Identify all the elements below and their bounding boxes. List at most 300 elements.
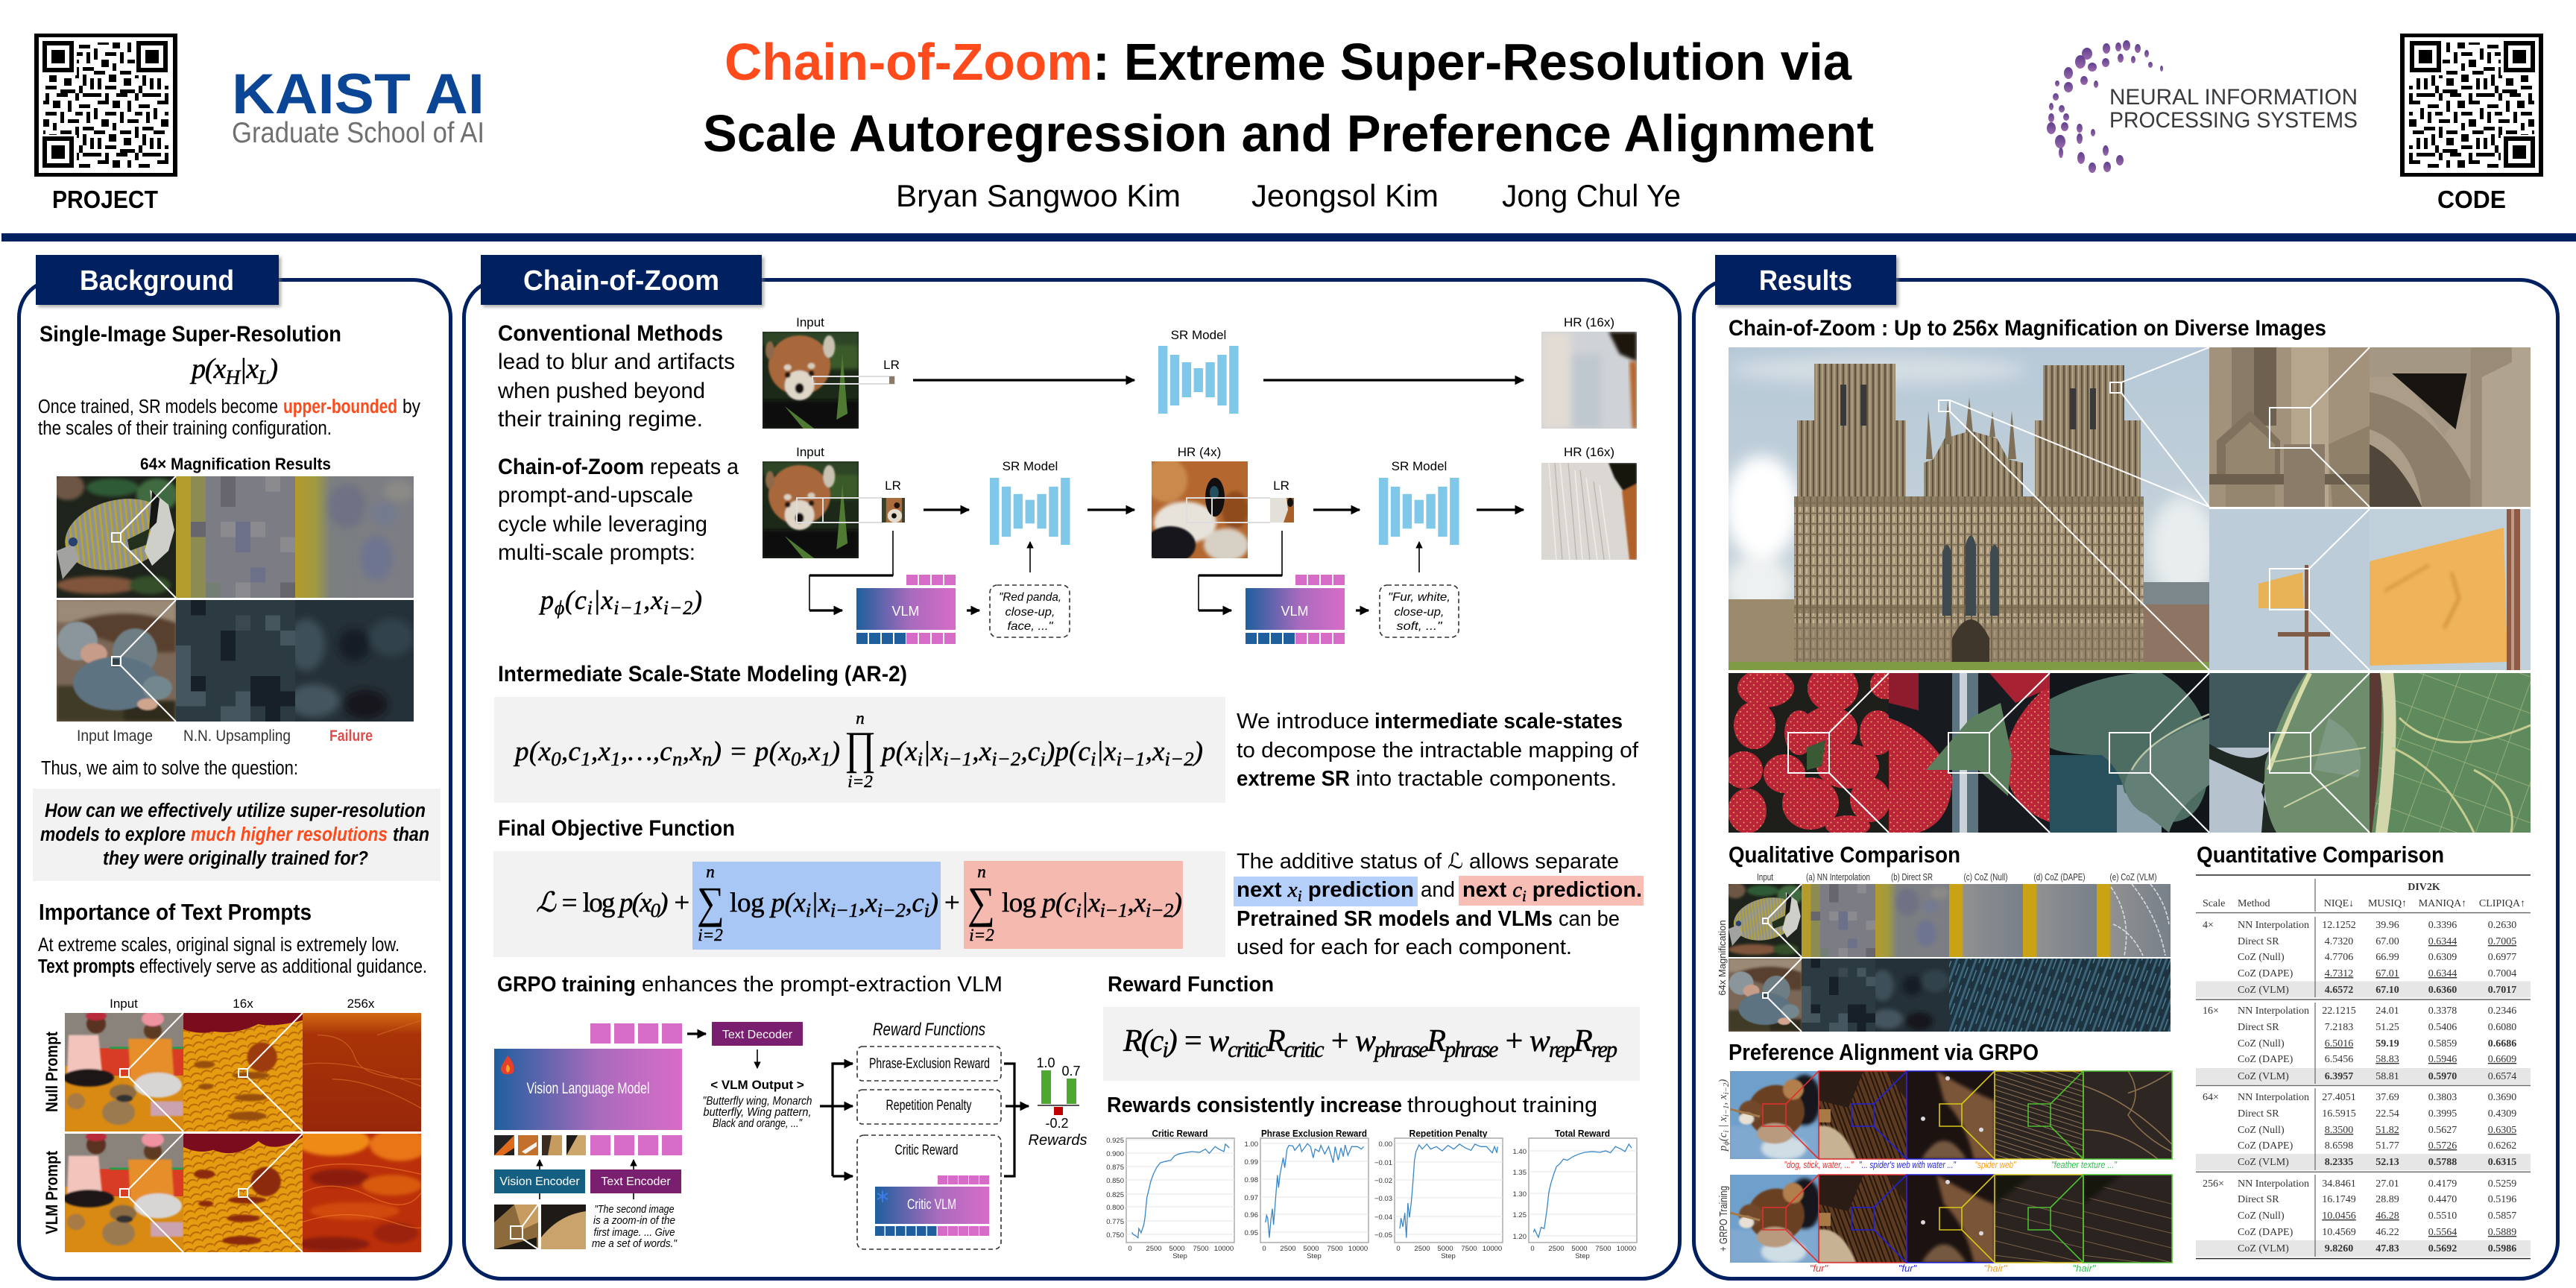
text: conventional methods: Conventional Methods [498,321,723,346]
chart: phrase exclusion reward: 0.96 [1245,1211,1258,1219]
panel frame [1693,280,2558,1279]
table group: 64x: 51.82 [2375,1125,2399,1136]
chart: phrase exclusion reward: 0.97 [1245,1194,1258,1202]
table group: 256x: 256× [2203,1178,2224,1190]
table group: 16x: 59.19 [2375,1038,2399,1049]
column labels: Input [1757,871,1773,883]
table group: 4x: Direct SR [2238,936,2279,947]
text: additive status: The additive status of ℒ allows separate [1237,850,1619,874]
text: additive status: and [1421,878,1455,902]
diagram: chain of zoom pipeline: close-up, [1394,606,1445,619]
diagram: chain of zoom pipeline: HR (16x) [1564,445,1614,459]
column labels [1757,871,2157,883]
diagram: GRPO training: "Butterfly wing, Monarch [702,1095,812,1108]
chart: total reward: 2500 [1548,1245,1565,1253]
table group: 16x: 0.6609 [2488,1054,2516,1065]
chart: repetition penalty: 10000 [1483,1245,1502,1253]
heading: intermediate scale-state: Intermediate Scale-State Modeling (AR-2) [498,662,907,686]
table group: 256x: 0.4470 [2428,1194,2457,1205]
diagram: GRPO training: "The second image [595,1203,674,1216]
table group: 16x: 22.1215 [2322,1006,2356,1017]
row label: VLM prompt: VLM Prompt [42,1150,61,1234]
chart: total reward: Step [1575,1252,1590,1260]
chart: critic reward [1106,1128,1234,1260]
diagram: GRPO training: Phrase-Exclusion Reward [869,1056,990,1072]
diagram: conventional pipeline: LR [883,358,900,372]
table group: 64x: 37.69 [2375,1092,2399,1103]
row label: null prompt: Null Prompt [42,1031,61,1112]
logo: KAIST AI: Graduate School of AI [232,117,484,149]
formula: objective: n [977,862,986,881]
text: chain of zoom description: prompt-and-upscale [498,483,693,508]
table group: 16x: 58.81 [2375,1071,2399,1082]
column labels: (e) CoZ (VLM) [2109,871,2157,883]
table group: 64x: 8.6598 [2325,1140,2353,1152]
label: project: PROJECT [52,186,158,213]
chart: repetition penalty: 7500 [1461,1245,1477,1253]
chart: repetition penalty: 0.00 [1379,1140,1392,1149]
table group: 4x: CoZ (DAPE) [2238,968,2294,979]
formula: objective: ∑ [697,878,724,927]
prompts row 2: "fur" [1898,1263,1918,1274]
chart: repetition penalty [1374,1128,1503,1260]
heading: qualitative: Qualitative Comparison [1729,842,1960,868]
table group: 256x: 0.5857 [2488,1210,2516,1222]
chart: critic reward: 10000 [1214,1245,1234,1253]
table group: 64x: Direct SR [2238,1108,2279,1120]
title: Scale Autoregression and Preference Alignment [703,104,1874,162]
diagram: conventional pipeline: HR (16x) [1564,315,1614,329]
panel frame [19,280,450,1279]
heading: rewards increase [1107,1093,1597,1117]
table group: 64x: 0.5627 [2428,1125,2457,1136]
logo: NeurIPS: NEURAL INFORMATION [2109,85,2358,110]
table group: 256x: 9.8260 [2325,1243,2353,1254]
text: conventional methods: their training regime. [498,407,703,432]
table group: 4x: 4.7312 [2325,968,2353,979]
text: scale states: into tractable components. [1356,767,1617,791]
chart: repetition penalty: Repetition Penalty [1409,1128,1488,1139]
diagram: chain of zoom pipeline: LR [1273,479,1289,493]
chart: critic reward: 7500 [1193,1245,1209,1253]
panel heading [481,255,764,307]
text: scale states: to decompose the intractable mapping of [1237,739,1639,763]
diagram: chain of zoom pipeline: "Fur, white, [1388,591,1450,604]
chart: critic reward: 2500 [1146,1245,1162,1253]
header rule [1,233,2576,242]
text: prompts description: Text prompts [38,956,135,977]
chart: phrase exclusion reward: 10000 [1348,1245,1368,1253]
chart: critic reward: 5000 [1169,1245,1185,1253]
table group: 4x: 4× [2203,920,2214,931]
chart: critic reward: 0.750 [1106,1231,1124,1240]
chart: repetition penalty: −0.04 [1374,1213,1392,1222]
callout: research question: models to explore [40,824,186,845]
formula: objective: i=2 [969,926,994,944]
diagram: conventional pipeline: Input [796,315,824,329]
table group: 64x: 27.4051 [2322,1092,2356,1103]
heading: quantitative: Quantitative Comparison [2197,842,2444,868]
image grid: preference alignment row 2 [1730,1175,2172,1263]
table group: 256x: 46.22 [2375,1227,2399,1238]
chart: critic reward: 0.775 [1106,1218,1124,1226]
diagram: GRPO training: < VLM Output > [710,1078,804,1092]
prompts row 2: "hair" [2073,1263,2097,1274]
text: chain of zoom description [498,455,739,565]
text: additive status: Pretrained SR models and VLMs [1237,907,1553,931]
table group: 64x: 8.2335 [2325,1157,2353,1168]
text: additive status: next ci prediction. [1462,878,1642,905]
chart: total reward: 1.30 [1513,1190,1527,1199]
logo: KAIST AI: KAIST AI [232,63,484,126]
table group: 64x: 16.5915 [2322,1108,2356,1120]
table group: 256x: 47.83 [2375,1243,2399,1254]
table group: 64x: 0.3803 [2428,1092,2457,1103]
column labels: 256x [347,997,375,1011]
chart: critic reward: 0.875 [1106,1164,1124,1172]
logo: NeurIPS: PROCESSING SYSTEMS [2109,108,2358,133]
chart: phrase exclusion reward: 0.98 [1245,1176,1258,1184]
table group: 256x: CoZ (DAPE) [2238,1227,2294,1238]
table: quantitative: MANIQA↑ [2419,898,2466,909]
table group: 4x: 0.6344 [2428,936,2457,947]
table group: 4x: 0.3396 [2428,920,2457,931]
panel heading: Chain-of-Zoom [523,265,719,297]
table group: 4x: 4.6572 [2325,985,2353,996]
table group: 256x: CoZ (Null) [2238,1210,2285,1222]
captions [77,727,373,745]
chart: total reward: 7500 [1595,1245,1611,1253]
chart: total reward: 0 [1530,1245,1535,1253]
prompts row 1 [1784,1159,2118,1170]
table group: 64x: 51.77 [2375,1140,2399,1152]
table: quantitative: CLIPIQA↑ [2479,898,2525,909]
chart: phrase exclusion reward: 5000 [1303,1245,1319,1253]
table group: 16x: 6.5016 [2325,1038,2353,1049]
table group: 256x: 0.5196 [2488,1194,2516,1205]
table group: 64x: 0.5726 [2428,1140,2457,1152]
prompts row 1: "feather texture ..." [2051,1159,2118,1170]
table group: 16x: 0.6080 [2488,1022,2516,1033]
panel: chain of zoom [464,255,1680,1279]
table group: 4x: 0.2630 [2488,920,2516,931]
formula: objective: n [706,862,715,881]
authors: Bryan Sangwoo Kim [896,178,1181,213]
chart: repetition penalty: 0 [1396,1245,1401,1253]
formula: AR-2 factorization [494,697,1225,803]
captions: Failure [329,727,373,745]
table group: 256x [2203,1178,2516,1254]
callout: research question: much higher resolutions [191,824,388,845]
table group: 16x: CoZ (Null) [2238,1038,2285,1049]
heading: GRPO training: enhances the prompt-extraction VLM [642,973,1003,997]
table: quantitative: NIQE↓ [2324,898,2354,909]
diagram: GRPO training: -0.2 [1045,1116,1069,1131]
formula: AR-2 factorization: ∏ [845,723,876,774]
authors [896,178,1681,213]
chart: phrase exclusion reward: 0.99 [1245,1158,1258,1167]
title: Chain-of-Zoom [724,33,1093,91]
table group: 4x: 0.6309 [2428,952,2457,963]
table group: 4x: 0.7017 [2488,985,2516,996]
diagram: GRPO training: Text Encoder [601,1175,671,1188]
column labels [110,997,375,1011]
column labels: (c) CoZ (Null) [1963,871,2008,883]
callout: research question: they were originally trained for? [103,848,368,869]
text: scale states: extreme SR [1237,767,1350,791]
image: cathedral [1729,347,2209,670]
text: scale states: We introduce [1237,710,1369,733]
diagram: GRPO training [494,1020,1087,1250]
diagram: GRPO training: 0.7 [1061,1064,1081,1079]
table group: 16x: 0.3378 [2428,1006,2457,1017]
diagram: GRPO training: Rewards [1029,1132,1087,1149]
table group: 16x: Direct SR [2238,1022,2279,1033]
text: upper bounded: the scales of their training configuration. [38,418,332,439]
table group: 256x: 0.5692 [2428,1243,2457,1254]
column labels: (b) Direct SR [1891,871,1933,883]
table: quantitative: DIV2K [2408,882,2440,893]
table group: 256x: 16.1749 [2322,1194,2356,1205]
title: : Extreme Super-Resolution via [1093,33,1852,91]
table group: 4x: 66.99 [2375,952,2399,963]
table: quantitative: MUSIQ↑ [2368,898,2407,909]
heading: up to 256x: Chain-of-Zoom : Up to 256x Magnification on Diverse Images [1729,316,2326,341]
text: conventional methods [497,321,735,432]
heading: GRPO training: GRPO training [497,973,636,997]
table: quantitative: Method [2238,898,2270,909]
diagram: chain of zoom pipeline: "Red panda, [999,591,1061,604]
diagram: GRPO training: Critic VLM [907,1197,956,1213]
formula: objective: + [943,888,961,918]
table group: 256x: 34.8461 [2322,1178,2356,1190]
title [703,33,1874,162]
diagram: chain of zoom pipeline: close-up, [1005,606,1055,619]
table group: 16x: CoZ (VLM) [2238,1071,2289,1082]
table group: 64x [2203,1092,2516,1168]
table group: 16x: NN Interpolation [2238,1006,2309,1017]
formula: reward [1103,1007,1640,1081]
table group: 64x: 0.6315 [2488,1157,2516,1168]
chart: total reward: 1.35 [1513,1169,1527,1177]
table group: 4x: 0.6360 [2428,985,2457,996]
captions: Input Image [77,727,153,745]
icon: project QR code [34,34,177,177]
table group: 64x: 22.54 [2375,1108,2399,1120]
panel heading: Background [80,265,234,297]
column labels: (d) CoZ (DAPE) [2033,871,2086,883]
table group: 256x: 46.28 [2375,1210,2399,1222]
table group: 256x: NN Interpolation [2238,1178,2309,1190]
panel heading [1715,255,1898,307]
panel heading: Results [1759,265,1852,297]
chart: repetition penalty: −0.01 [1374,1159,1392,1167]
callout: research question [33,789,441,881]
diagram: chain of zoom pipeline: SR Model [1003,459,1058,473]
chart: critic reward: 0.825 [1106,1191,1124,1199]
prompts row 1: "... spider's web with water ..." [1859,1159,1957,1170]
table group: 64x: 52.13 [2375,1157,2399,1168]
chart: critic reward: 0.925 [1106,1137,1124,1145]
heading: text prompts: Importance of Text Prompts [39,899,312,925]
table group: 4x: 12.1252 [2322,920,2356,931]
table group: 64x: CoZ (Null) [2238,1125,2285,1136]
table: quantitative [2196,875,2531,1259]
prompts row 2: "fur" [1810,1263,1829,1274]
panel heading [36,255,281,307]
table group: 16x: 0.5859 [2428,1038,2457,1049]
table group: 4x: 0.6344 [2428,968,2457,979]
header [1,33,2576,242]
chart: critic reward: Step [1172,1252,1187,1260]
table group: 4x: CoZ (Null) [2238,952,2285,963]
row label: GRPO: + GRPO Training [1717,1186,1730,1251]
text: prompts description: At extreme scales, original signal is extremely low. [38,935,400,956]
diagram: GRPO training: Critic Reward [894,1143,959,1158]
table group: 16x: 0.5406 [2428,1022,2457,1033]
panel: background [19,255,450,1279]
heading: rewards increase: Rewards consistently increase [1107,1093,1402,1117]
table group: 64x: CoZ (VLM) [2238,1157,2289,1168]
table group: 4x: 0.7005 [2488,936,2516,947]
text: prompts description: effectively serve as additional guidance. [139,956,427,977]
table group: 256x: 0.4179 [2428,1178,2457,1190]
table group: 4x: 67.00 [2375,936,2399,947]
chart: repetition penalty: −0.05 [1374,1231,1392,1240]
diagram: GRPO training: butterfly, Wing pattern, [704,1106,811,1119]
authors: Jeongsol Kim [1251,178,1439,213]
panel: results [1693,255,2558,1279]
logo: NeurIPS [2047,40,2358,173]
chart: repetition penalty: 2500 [1414,1245,1430,1253]
table group: 64x: 8.3500 [2325,1125,2353,1136]
diagram: GRPO training: Vision Language Model [526,1080,650,1097]
formula: AR-2 factorization: p(x0,c1,x1,…,cn,xn) = p(x0,x1) [513,736,840,770]
table group: 16x: CoZ (DAPE) [2238,1054,2294,1065]
table group: 256x: CoZ (VLM) [2238,1243,2289,1254]
formula: AR-2 factorization: n [856,709,865,727]
formula: objective [493,851,1225,957]
table group: 16x: 51.25 [2375,1022,2399,1033]
text: upper bounded [38,397,420,439]
table group: 4x: 67.01 [2375,968,2399,979]
table group: 16x: 6.5456 [2325,1054,2353,1065]
table group: 64x: 64× [2203,1092,2219,1103]
chart: phrase exclusion reward: Phrase Exclusion Reward [1261,1128,1367,1139]
column labels: 16x [233,997,253,1011]
text: additive status: used for each for each component. [1237,935,1572,959]
table group: 256x: 0.5889 [2488,1227,2516,1238]
table: quantitative: Scale [2203,898,2225,909]
table group: 256x: 0.5259 [2488,1178,2516,1190]
image grid: qualitative [1726,883,2171,1032]
formula: objective: i=2 [698,926,723,944]
heading: reward function: Reward Function [1108,973,1274,997]
callout: research question: than [393,824,429,845]
chart: phrase exclusion reward: 0.95 [1245,1229,1258,1237]
diagram: chain of zoom pipeline: VLM [891,604,920,619]
diagram: chain of zoom pipeline: LR [885,479,901,493]
chart: repetition penalty: −0.02 [1374,1177,1392,1185]
chart: phrase exclusion reward: 0 [1262,1245,1266,1253]
table group: 256x: 10.4569 [2322,1227,2356,1238]
table group: 16x: 7.2183 [2325,1022,2353,1033]
chart: repetition penalty: −0.03 [1374,1195,1392,1203]
chart: total reward: 1.25 [1513,1211,1527,1219]
table group: 16x: 24.01 [2375,1006,2399,1017]
table group: 256x: Direct SR [2238,1194,2279,1205]
table group: 16x: 6.3957 [2325,1071,2353,1082]
table group: 16x: 0.2346 [2488,1006,2516,1017]
text: chain of zoom description: multi-scale prompts: [498,540,695,565]
chart: repetition penalty: Step [1441,1252,1456,1260]
chart: critic reward: Critic Reward [1152,1128,1208,1139]
table group: 16x: 16× [2203,1006,2219,1017]
diagram: GRPO training: Text Decoder [722,1029,793,1041]
table group: 16x: 58.83 [2375,1054,2399,1065]
diagram: GRPO training: first image. ... Give [593,1226,675,1239]
logo: KAIST AI [232,63,484,149]
formula: AR-2 factorization: i=2 [847,772,873,791]
text: additive status [1234,850,1644,959]
chart: phrase exclusion reward: 1.00 [1245,1140,1258,1149]
text: thus: Thus, we aim to solve the question: [41,758,298,779]
captions: N.N. Upsampling [183,727,291,745]
text: upper bounded: Once trained, SR models become [38,397,278,417]
diagram: GRPO training: is a zoom-in of the [593,1214,675,1227]
table group: 4x: 4.7320 [2325,936,2353,947]
chart title: 64x magnification: 64× Magnification Results [140,455,331,473]
formula: objective: log p(ci|xi−1,xi−2) [1002,888,1182,921]
chart: total reward: 5000 [1571,1245,1588,1253]
diagram: chain of zoom pipeline: HR (4x) [1178,445,1221,459]
table group: 256x: 0.5986 [2488,1243,2516,1254]
icon: code QR code [2400,34,2543,177]
heading: preference alignment: Preference Alignment via GRPO [1729,1039,2039,1065]
chart: phrase exclusion reward: 2500 [1280,1245,1296,1253]
chart: total reward: 1.20 [1513,1233,1527,1241]
table group: 4x: CoZ (VLM) [2238,985,2289,996]
panel frame [464,280,1680,1279]
table group: 16x: 0.5946 [2428,1054,2457,1065]
chart: phrase exclusion reward [1245,1128,1368,1260]
image grid: prompt comparison [63,1011,429,1252]
formula: reward: R(ci) = wcriticRcritic + wphraseRphrase + wrepRrep [1123,1024,1617,1062]
image mosaic: diverse images [1724,347,2531,836]
table group: 16x: 0.5970 [2428,1071,2457,1082]
prompts row 1: "spider web" [1975,1159,2017,1170]
text: chain of zoom description: repeats a [650,455,739,479]
diagram: GRPO training: 1.0 [1036,1055,1055,1070]
table group: 64x: 0.4309 [2488,1108,2516,1120]
prompts row 2: "hair" [1984,1263,2008,1274]
diagram: chain of zoom pipeline: VLM [1281,604,1309,619]
text: additive status: can be [1559,907,1620,931]
image grid: preference alignment row 1 [1730,1071,2172,1160]
diagram: chain of zoom pipeline: SR Model [1392,459,1447,473]
text: chain of zoom description: Chain-of-Zoom [498,455,644,479]
formula: objective: ℒ = log p(x0) + [536,888,691,921]
text: scale states: intermediate scale-states [1374,710,1623,733]
formula: p(xH|xL): p(xH|xL) [189,353,278,388]
chart: repetition penalty: 5000 [1437,1245,1453,1253]
table group: 16x: 0.6686 [2488,1038,2516,1049]
diagram: GRPO training: Repetition Penalty [886,1098,972,1114]
formula: objective: log p(xi|xi−1,xi−2,ci) [730,888,938,921]
table group: 4x: 4.7706 [2325,952,2353,963]
table group: 4x: 67.10 [2375,985,2399,996]
chart: total reward: 1.40 [1513,1148,1527,1156]
